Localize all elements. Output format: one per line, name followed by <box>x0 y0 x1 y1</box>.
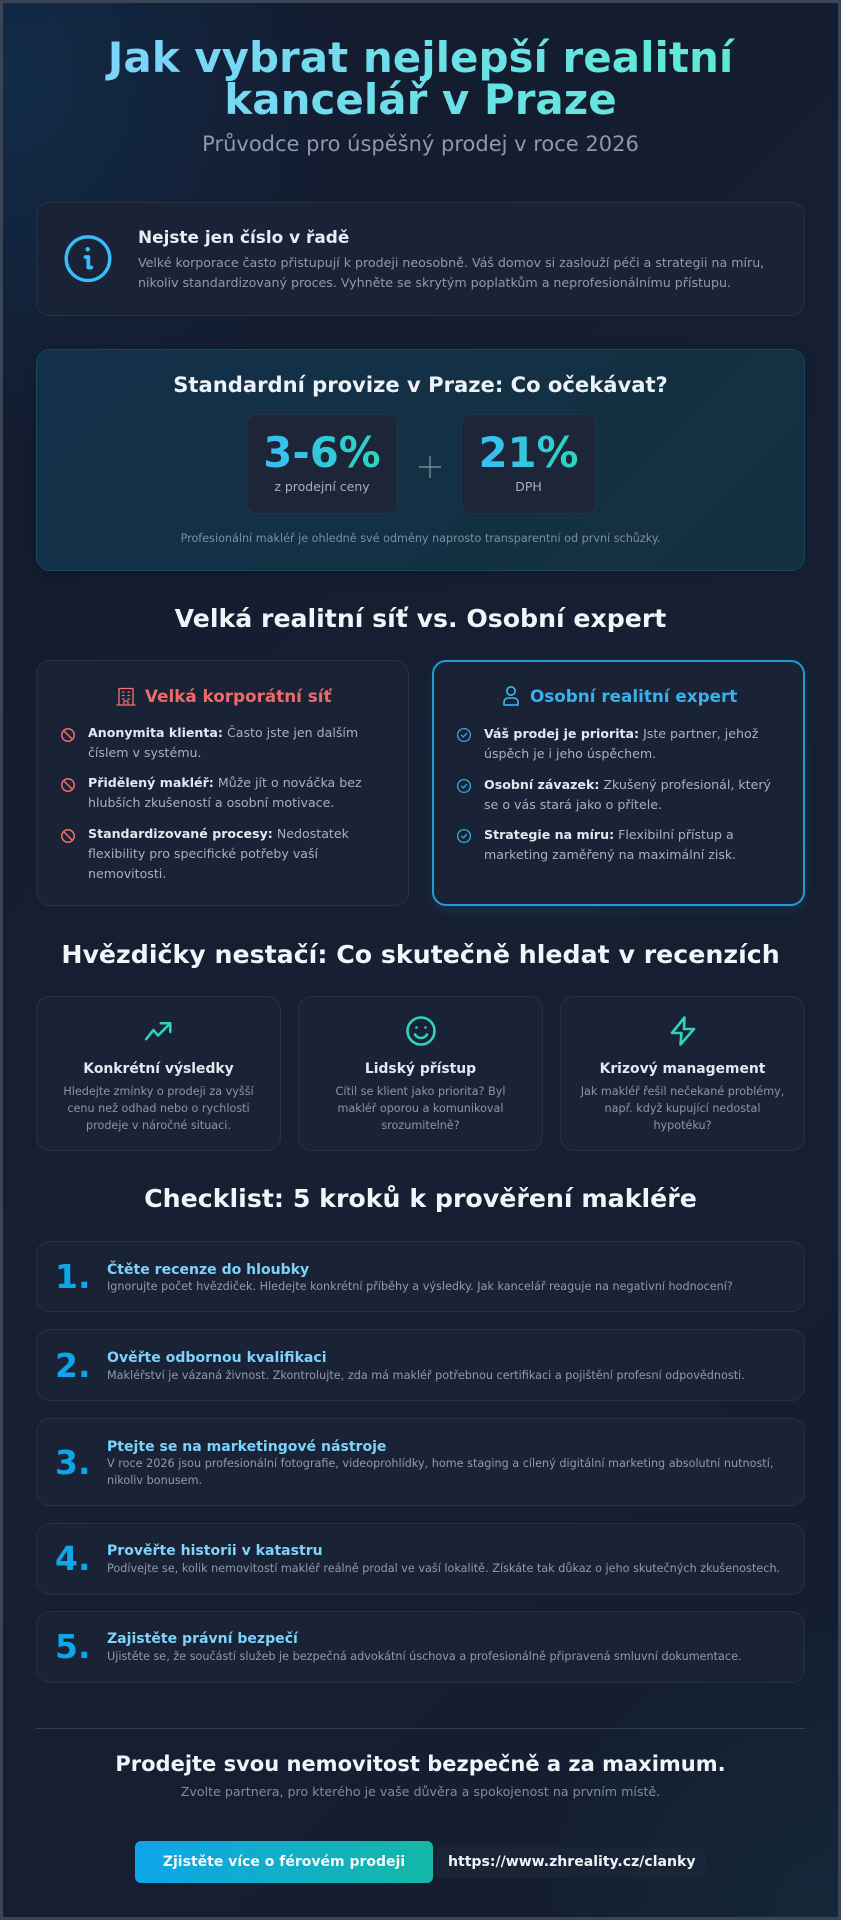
item text: hlubších zkušeností a osobní motivace. <box>88 795 334 810</box>
item text: Standardizované procesy: Nedostatek <box>88 826 349 841</box>
step text <box>107 1457 773 1487</box>
subtitle: Průvodce pro úspěšný prodej v roce 2026 <box>202 132 639 156</box>
panel: crisis management <box>560 996 805 1151</box>
icon: check circle <box>456 728 471 742</box>
card text <box>580 1085 784 1132</box>
stat value: 21% <box>478 428 579 477</box>
heading: reviews: Hvězdičky nestačí: Co skutečně hledat v recenzích <box>61 940 780 969</box>
card title: Krizový management <box>600 1061 765 1077</box>
icon: trending up <box>144 1022 172 1040</box>
card text: hypotéku? <box>653 1119 712 1132</box>
item text <box>88 775 362 810</box>
item text: Váš prodej je priorita: Jste partner, jehož <box>484 726 758 741</box>
step title: Ověřte odbornou kvalifikaci <box>107 1350 327 1366</box>
icon: plus <box>419 456 441 478</box>
step title: Ptejte se na marketingové nástroje <box>107 1439 386 1455</box>
title: kancelář v Praze <box>224 75 617 124</box>
card text: Hledejte zmínky o prodeji za vyšší <box>63 1085 254 1098</box>
CTA button <box>135 1841 433 1883</box>
item text: Přidělený makléř: Může jít o nováčka bez <box>88 775 362 790</box>
step title: Zajistěte právní bezpečí <box>107 1631 298 1647</box>
item text: se o vás stará jako o přítele. <box>484 797 662 812</box>
item text: flexibility pro specifické potřeby vaší <box>88 846 318 861</box>
panel: human approach <box>298 996 543 1151</box>
step number: 3. <box>55 1443 90 1482</box>
stat: VAT <box>461 414 596 514</box>
icon: smile <box>406 1016 436 1046</box>
corporate item 1 <box>61 725 358 760</box>
expert item 1 <box>456 726 758 761</box>
panel: step 1 <box>36 1241 805 1312</box>
panel: results <box>36 996 281 1151</box>
step number: 1. <box>55 1257 90 1296</box>
intro heading: Nejste jen číslo v řadě <box>138 227 349 247</box>
step text: Makléřství je vázaná živnost. Zkontrolujte, zda má makléř potřebnou certifikaci a pojištění profesní odpovědnosti. <box>107 1369 745 1382</box>
item text: Osobní závazek: Zkušený profesionál, který <box>484 777 771 792</box>
intro text: nikoliv standardizovaný proces. Vyhněte se skrytým poplatkům a neprofesionálnímu přístupu. <box>138 275 731 290</box>
corporate item 2 <box>61 775 362 810</box>
intro text: Velké korporace často přistupují k prodeji neosobně. Váš domov si zaslouží péči a strategii na míru, <box>138 255 764 270</box>
item text <box>484 827 736 862</box>
step text: Ignorujte počet hvězdiček. Hledejte konkrétní příběhy a výsledky. Jak kancelář reaguje na negativní hodnocení? <box>107 1280 733 1293</box>
corporate heading text: Velká korporátní síť <box>145 686 332 706</box>
item text: úspěch je i jeho úspěchem. <box>484 746 656 761</box>
panel: commission <box>36 349 805 571</box>
expert heading text: Osobní realitní expert <box>530 686 737 706</box>
card text: cenu než odhad nebo o rychlosti <box>67 1102 250 1115</box>
panel: step 2 <box>36 1329 805 1401</box>
stat: commission rate <box>246 414 398 514</box>
item text <box>88 826 349 881</box>
panel: step 5 <box>36 1611 805 1683</box>
commission heading: Standardní provize v Praze: Co očekávat? <box>173 372 668 397</box>
step number: 4. <box>55 1539 90 1578</box>
stat value: 3-6% <box>263 428 381 477</box>
step text: Ujistěte se, že součástí služeb je bezpečná advokátní úschova a profesionálně připravená smluvní dokumentace. <box>107 1650 742 1663</box>
expert item 2 <box>456 777 771 812</box>
card title: Konkrétní výsledky <box>83 1061 234 1077</box>
panel: corporate network <box>36 660 409 906</box>
item text <box>484 777 771 812</box>
heading: comparison: Velká realitní síť vs. Osobní expert <box>175 604 666 633</box>
icon: building <box>116 688 136 706</box>
card text: makléř oporou a komunikoval <box>337 1102 504 1115</box>
icon: ban <box>61 829 75 843</box>
title: Jak vybrat nejlepší realitní <box>108 33 733 82</box>
intro text <box>138 255 764 290</box>
panel: step 3 <box>36 1418 805 1506</box>
item text: marketing zaměřený na maximální zisk. <box>484 847 736 862</box>
icon: ban <box>61 728 75 742</box>
footer text: Zvolte partnera, pro kterého je vaše důvěra a spokojenost na prvním místě. <box>181 1784 660 1799</box>
card text: Cítil se klient jako priorita? Byl <box>336 1085 505 1098</box>
icon: user <box>503 686 519 706</box>
panel: personal expert <box>432 660 805 906</box>
card text: např. když kupující nedostal <box>605 1102 760 1115</box>
card title: Lidský přístup <box>365 1061 476 1077</box>
icon: info circle <box>64 235 112 282</box>
corporate item 3 <box>61 826 349 881</box>
item text: Anonymita klienta: Často jste jen dalším <box>88 725 358 740</box>
item text <box>484 726 758 761</box>
item text <box>88 725 358 760</box>
footer heading: Prodejte svou nemovitost bezpečně a za maximum. <box>115 1752 726 1776</box>
card text: prodeje v náročné situaci. <box>86 1119 231 1132</box>
card text <box>336 1085 505 1132</box>
icon: check circle <box>456 779 471 793</box>
URL label: https://www.zhreality.cz/clanky <box>448 1854 696 1870</box>
step title: Prověřte historii v katastru <box>107 1543 323 1559</box>
item text: nemovitosti. <box>88 866 166 881</box>
item text: číslem v systému. <box>88 745 201 760</box>
CTA button: Zjistěte více o férovém prodeji <box>163 1854 405 1870</box>
item text: Strategie na míru: Flexibilní přístup a <box>484 827 734 842</box>
commission note: Profesionální makléř je ohledně své odměny naprosto transparentní od první schůzky. <box>181 532 660 545</box>
step text: nikoliv bonusem. <box>107 1474 202 1487</box>
title <box>100 37 741 121</box>
stat label: DPH <box>515 479 542 494</box>
icon: ban <box>61 778 75 792</box>
panel: intro callout <box>36 202 805 316</box>
step title: Čtěte recenze do hloubky <box>107 1262 309 1278</box>
step text: V roce 2026 jsou profesionální fotografie, videoprohlídky, home staging a cílený digitální marketing absolutní nutností, <box>107 1457 773 1470</box>
card text <box>63 1085 254 1132</box>
corporate heading <box>116 686 332 706</box>
expert item 3 <box>456 827 736 862</box>
panel: step 4 <box>36 1523 805 1595</box>
step number: 5. <box>55 1627 90 1666</box>
icon: check circle <box>456 829 471 843</box>
icon: lightning bolt <box>670 1016 696 1046</box>
URL label <box>436 1847 706 1878</box>
heading: checklist: Checklist: 5 kroků k prověření makléře <box>144 1184 697 1213</box>
step number: 2. <box>55 1346 90 1385</box>
card text: Jak makléř řešil nečekané problémy, <box>581 1085 784 1098</box>
step text: Podívejte se, kolik nemovitostí makléř reálně prodal ve vaší lokalitě. Získáte tak důkaz o jeho skutečných zkušenostech. <box>107 1562 780 1575</box>
stat label: z prodejní ceny <box>274 479 370 494</box>
card text: srozumitelně? <box>381 1119 460 1132</box>
expert heading <box>503 686 737 706</box>
